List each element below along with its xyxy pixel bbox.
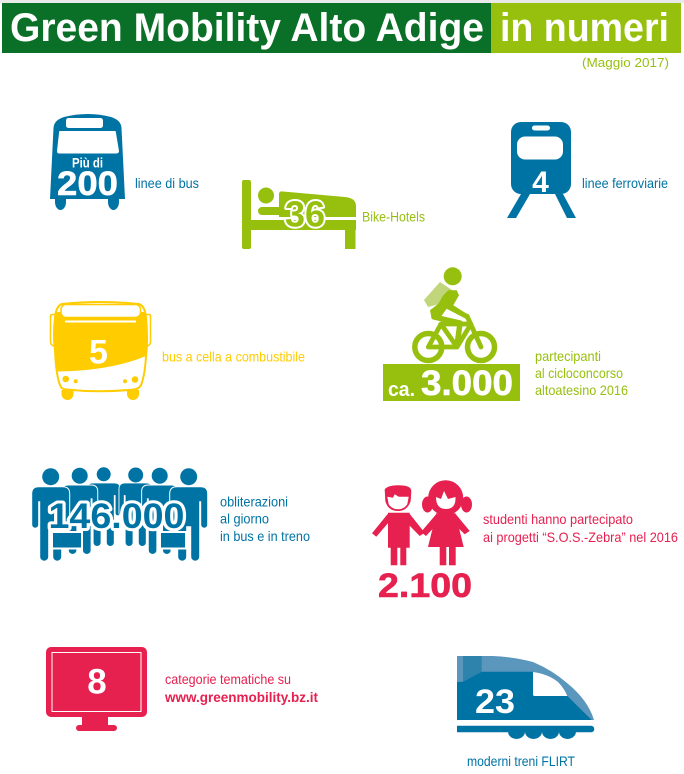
label: categorie: www.greenmobility.bz.it: [164, 689, 318, 705]
panel: bike hotels: [242, 180, 425, 249]
label: studenti: [483, 511, 678, 545]
label: partecipanti: al cicloconcorso: [535, 365, 623, 381]
label: bus a cella a combustibile: bus a cella a combustibile: [162, 348, 305, 364]
icon: yellow bus: [50, 302, 150, 400]
label: categorie: [164, 671, 318, 705]
icon: crowd of people: [32, 467, 208, 561]
icon: bed: 36: [285, 194, 325, 234]
icon: FLIRT train: 23: [475, 683, 515, 721]
icon: yellow bus: 5: [89, 334, 108, 372]
label: obliterazioni: [220, 494, 310, 544]
number plate: ca. 3.000: 3.000: [421, 364, 513, 403]
label: studenti: studenti hanno partecipato: [483, 511, 633, 527]
panel: bus lines: [50, 114, 199, 210]
icon: monitor: 8: [87, 662, 107, 702]
label: partecipanti: partecipanti: [535, 348, 601, 364]
number plate: ca. 3.000: ca.: [388, 379, 415, 401]
panel: FLIRT trains: [457, 656, 594, 769]
title banner: in numeri: [500, 6, 669, 50]
number: 2.100: 2.100: [378, 567, 472, 605]
panel: website categories: [46, 647, 318, 731]
icon: train front: [507, 122, 576, 218]
icon: train front: 4: [532, 166, 549, 199]
title banner: Green Mobility Alto Adige: [10, 6, 484, 50]
icon: two children: [372, 480, 472, 565]
title banner: [2, 3, 681, 53]
label: obliterazioni: al giorno: [220, 510, 269, 526]
label: Bike-Hotels: Bike-Hotels: [362, 208, 425, 224]
label: moderni treni FLIRT: moderni treni FLIRT: [467, 753, 575, 769]
panel: validations: [32, 467, 310, 561]
icon: blue bus: Più di: [72, 155, 103, 171]
label: categorie: categorie tematiche su: [165, 671, 291, 687]
icon: blue bus: [50, 114, 125, 210]
label: linee ferroviarie: linee ferroviarie: [582, 175, 668, 191]
icon: monitor: [46, 647, 147, 731]
panel: railway lines: [507, 122, 668, 218]
panel: students: [372, 480, 678, 605]
label: partecipanti: altoatesino 2016: [535, 382, 628, 398]
icon: cyclist: [415, 267, 494, 360]
label: obliterazioni: obliterazioni: [220, 494, 288, 510]
number plate: ca. 3.000: [383, 364, 520, 403]
date note: (Maggio 2017): [582, 55, 669, 70]
panel: bike contest: [383, 267, 628, 403]
icon: blue bus: 200: [57, 165, 118, 203]
number: 146.000: 146.000: [48, 497, 184, 536]
panel: fuel cell buses: [50, 302, 305, 400]
label: linee di bus: linee di bus: [135, 175, 199, 191]
label: obliterazioni: in bus e in treno: [220, 528, 310, 544]
label: partecipanti: [535, 348, 628, 398]
icon: bed: [242, 180, 356, 249]
